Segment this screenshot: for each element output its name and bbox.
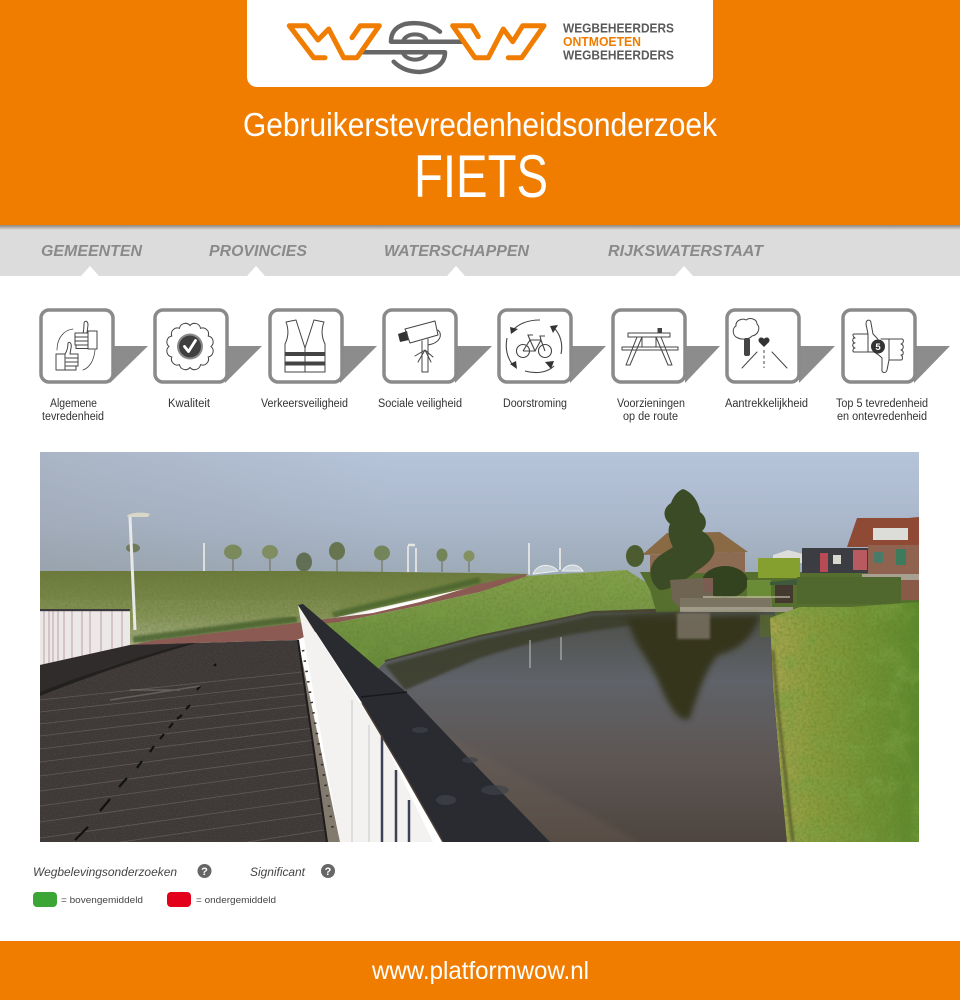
title: Gebruikerstevredenheidsonderzoek bbox=[243, 106, 717, 143]
icon: sociale veiligheid bbox=[384, 310, 492, 383]
icon: help: ? bbox=[325, 866, 332, 878]
photo: right grass verge bbox=[770, 600, 919, 842]
logo: left W bbox=[289, 26, 379, 58]
legend: colour key bbox=[33, 892, 276, 907]
logo: right W bbox=[453, 26, 544, 58]
photo: red cycle path bbox=[130, 574, 528, 645]
icon labels: Sociale veiligheid bbox=[378, 398, 462, 410]
icon labels: op de route bbox=[623, 411, 678, 423]
navigation tabs bbox=[41, 243, 764, 276]
icon: top 5: 5 bbox=[875, 342, 881, 353]
icon labels: Voorzieningen bbox=[617, 398, 685, 410]
navigation tabs: PROVINCIES bbox=[209, 243, 307, 260]
photo: canal water bbox=[370, 612, 790, 842]
photo: dike meadow bbox=[40, 570, 530, 666]
legend: colour key: = bovengemiddeld bbox=[61, 895, 143, 906]
legend: survey links bbox=[33, 864, 335, 879]
photo: bicycle bridge over a canal bbox=[40, 452, 919, 848]
photo: main white railing with dark handrail bbox=[298, 604, 550, 842]
navigation tabs: GEMEENTEN bbox=[41, 243, 142, 260]
photo: bridge deck bbox=[40, 640, 330, 848]
icon labels: Doorstroming bbox=[503, 398, 567, 410]
legend: survey links: Significant bbox=[250, 865, 306, 879]
icon: kwaliteit bbox=[155, 310, 262, 383]
logo panel bbox=[247, 0, 713, 87]
footer bbox=[0, 941, 960, 1000]
logo: tagline: ONTMOETEN bbox=[563, 34, 641, 49]
navigation tabs: WATERSCHAPPEN bbox=[384, 243, 529, 260]
logo: tagline: WEGBEHEERDERS bbox=[563, 20, 674, 36]
icon labels: Verkeersveiligheid bbox=[261, 398, 348, 410]
photo: distant trees and lamp posts bbox=[126, 542, 584, 575]
icon labels: Top 5 tevredenheid bbox=[836, 398, 928, 410]
icon: algemene tevredenheid bbox=[41, 310, 148, 383]
navigation tabs: RIJKSWATERSTAAT bbox=[608, 243, 764, 260]
icon labels bbox=[42, 398, 928, 423]
icon labels: Algemene bbox=[50, 398, 97, 410]
title: FIETS bbox=[414, 143, 548, 210]
icon: aantrekkelijkheid bbox=[727, 310, 835, 383]
icon: help bbox=[321, 864, 335, 878]
icon: top 5 bbox=[843, 310, 950, 383]
icon: verkeersveiligheid bbox=[270, 310, 377, 383]
icon: help: ? bbox=[201, 866, 208, 878]
photo: houses and tree bbox=[626, 489, 919, 625]
icon: voorzieningen bbox=[613, 310, 720, 383]
legend: colour key: = ondergemiddeld bbox=[196, 895, 276, 906]
icon labels: Kwaliteit bbox=[168, 398, 211, 410]
logo: tagline bbox=[563, 20, 674, 62]
logo: chain link bbox=[362, 23, 464, 72]
title bbox=[243, 106, 717, 210]
header: orange band bbox=[0, 0, 960, 276]
icon labels: Aantrekkelijkheid bbox=[725, 398, 808, 410]
photo: left white railing bbox=[40, 513, 150, 665]
legend: survey links: Wegbelevingsonderzoeken bbox=[33, 865, 177, 879]
icon labels: tevredenheid bbox=[42, 411, 104, 423]
photo: green bank bbox=[326, 570, 656, 668]
icon: help bbox=[198, 864, 212, 878]
logo: tagline: WEGBEHEERDERS bbox=[563, 48, 674, 62]
icon: doorstroming bbox=[499, 310, 606, 383]
icon labels: en ontevredenheid bbox=[837, 411, 927, 423]
footer: www.platformwow.nl bbox=[371, 957, 589, 985]
